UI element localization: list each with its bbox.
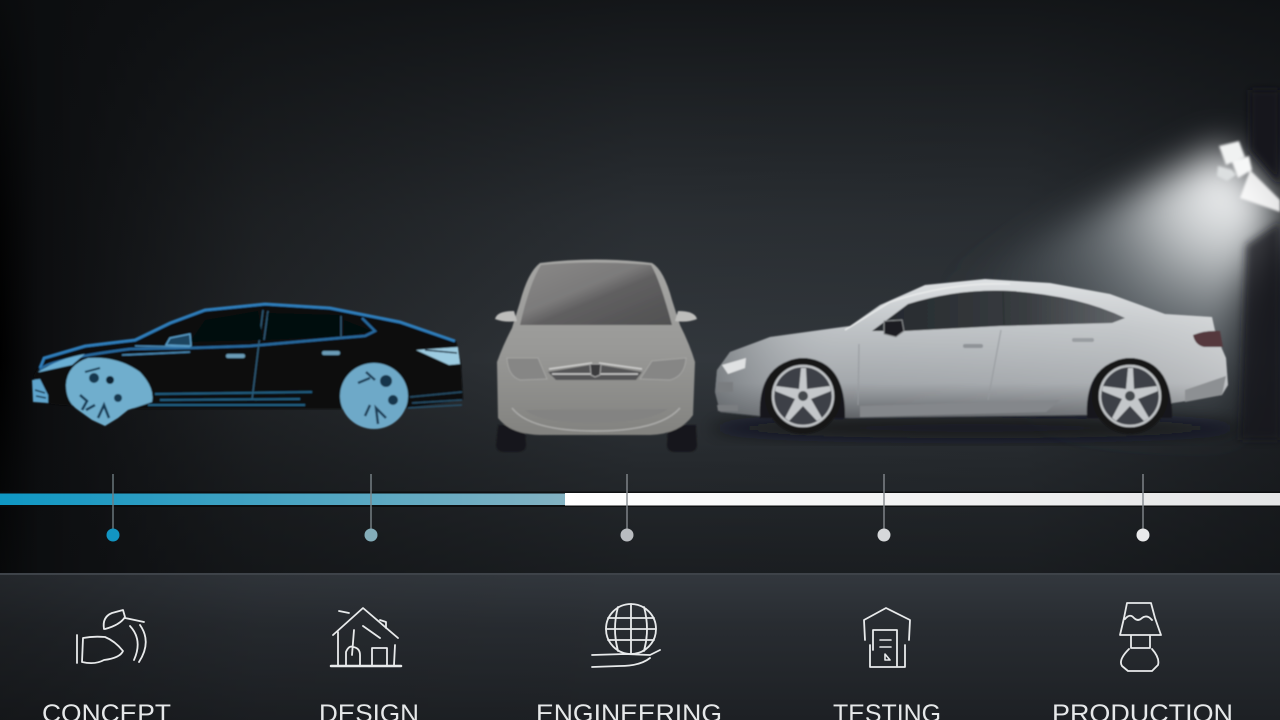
door handles: [226, 354, 245, 358]
front wheel: [66, 358, 152, 426]
body: [715, 279, 1228, 418]
front wheel: [760, 358, 845, 434]
body: [497, 260, 695, 435]
progress: white segment: [565, 493, 1280, 506]
milestone: testing: [878, 474, 890, 542]
roof trim: [845, 284, 1010, 330]
stage: testing: [833, 608, 941, 720]
panel: stages: [0, 573, 1280, 720]
car: blue wireframe concept: [32, 303, 463, 429]
headlight: [722, 358, 746, 374]
floor shadow: [710, 418, 1240, 438]
sill: [860, 400, 1060, 417]
stage: production: [1052, 603, 1233, 720]
lower bumper: [525, 409, 668, 423]
milestones: [106, 474, 1150, 542]
light glow: [880, 145, 1280, 430]
headlight: [32, 379, 48, 403]
milestone: concept: [106, 474, 120, 542]
sills: [148, 392, 312, 405]
timeline bar: [0, 492, 1280, 507]
car: silver production sedan: [710, 279, 1240, 438]
rear wheel: [340, 363, 408, 429]
taillight: [1193, 331, 1223, 347]
door seams: [858, 330, 1001, 405]
lamp: [1217, 141, 1280, 212]
mirror: [884, 320, 904, 337]
outline: [40, 304, 455, 368]
stage: concept: [42, 610, 171, 720]
windows: [190, 311, 372, 342]
icon: engineering: [592, 604, 660, 667]
rear bumper: [1185, 376, 1226, 402]
wall shadow: [1250, 90, 1280, 185]
headlights: [507, 358, 547, 380]
tyres: [496, 425, 526, 452]
stage: engineering: [536, 604, 722, 720]
icon: testing: [864, 608, 910, 667]
windshield: [520, 262, 672, 325]
door handles: [963, 344, 983, 348]
mirrors: [495, 311, 517, 322]
grille: [548, 365, 642, 380]
icon: concept: [77, 610, 146, 663]
icon: production: [1120, 603, 1161, 671]
progress: blue segment: [0, 494, 565, 505]
taillight: [416, 347, 460, 365]
milestone: design: [364, 474, 378, 542]
mirror: [166, 334, 191, 346]
windows: [872, 291, 1125, 331]
car body: [34, 303, 463, 409]
badge: [590, 364, 601, 377]
milestone: production: [1136, 474, 1150, 542]
rear wheel: [1087, 358, 1172, 434]
stage: design: [319, 608, 419, 720]
spotlight: [880, 90, 1280, 440]
icon: design: [331, 608, 401, 666]
car: grey clay front view: [495, 260, 697, 452]
milestone: engineering: [620, 474, 634, 542]
